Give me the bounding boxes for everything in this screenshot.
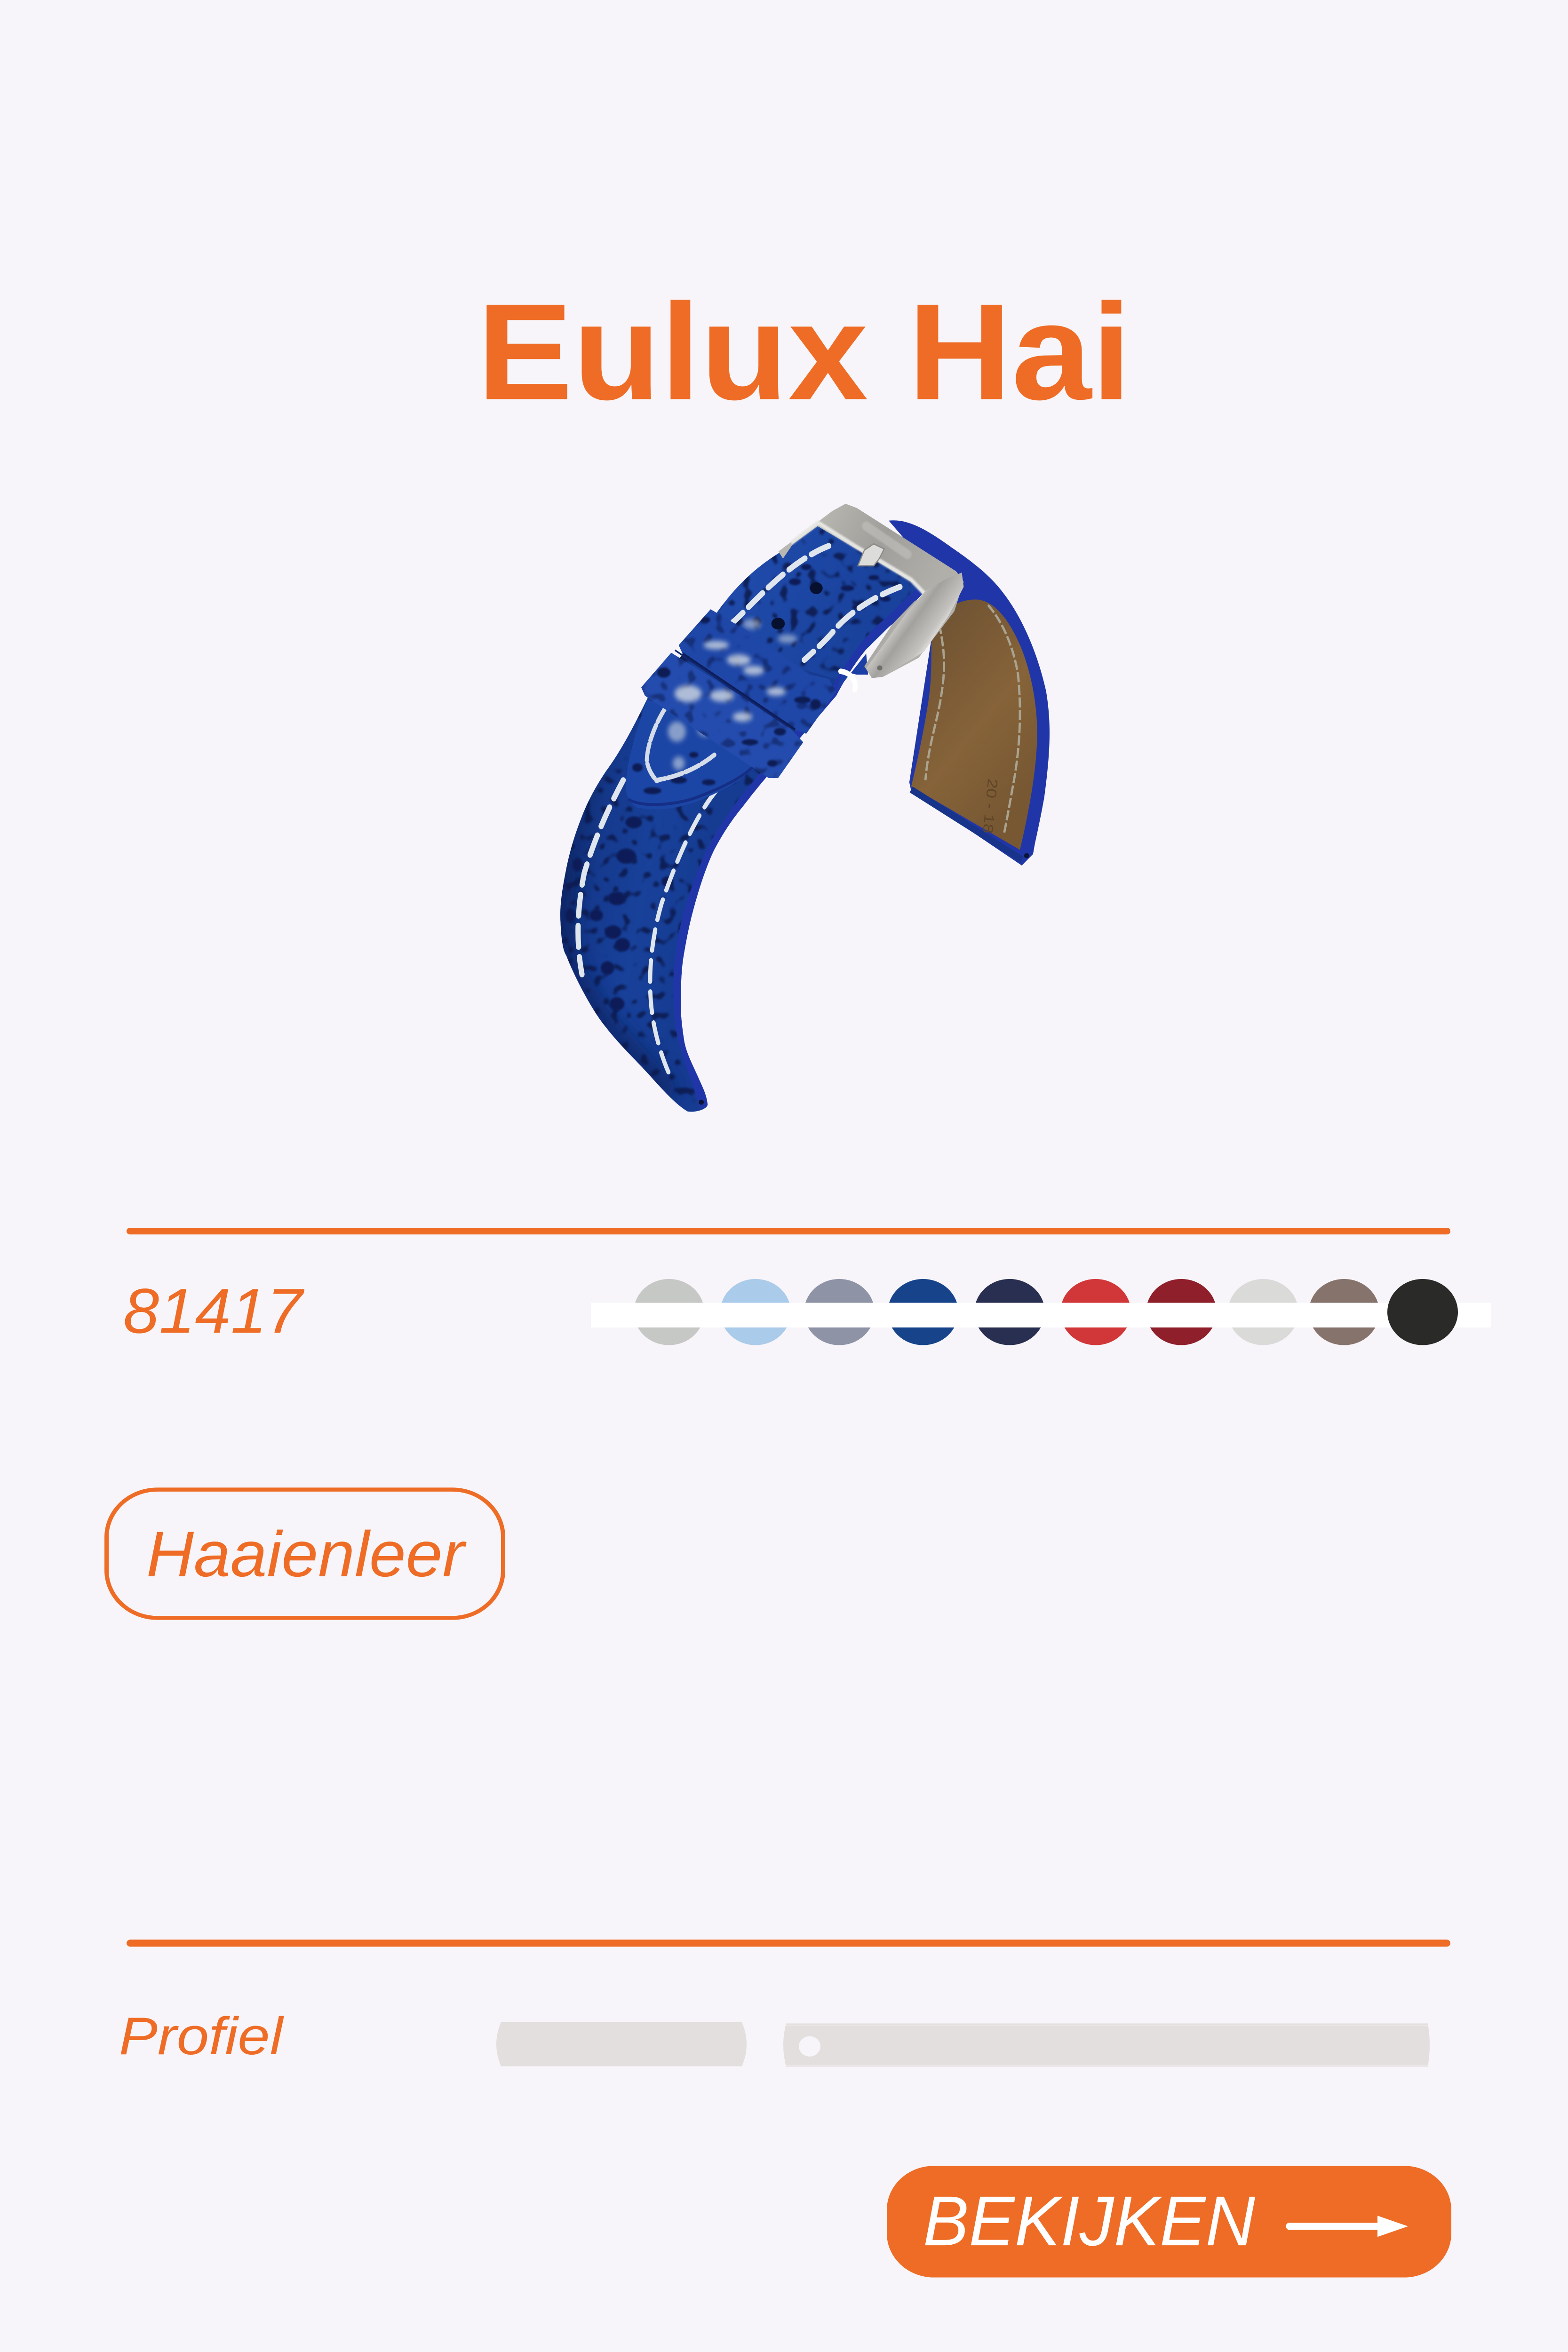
colour swatches <box>591 1279 1491 1345</box>
lining size marks: 20 - 18 <box>979 778 1001 834</box>
buckle <box>779 504 963 678</box>
swatch: royal blue <box>888 1279 958 1345</box>
dark spots <box>565 564 890 1010</box>
strap: rear section <box>889 520 1050 866</box>
keeper loops <box>637 603 840 785</box>
spring bar with white thread <box>836 653 868 691</box>
product photo: blue shark leather watch strap <box>555 504 1050 1118</box>
profile diagram <box>496 2022 1430 2066</box>
title: Eulux Hai <box>477 275 1131 428</box>
button <box>887 2166 1451 2278</box>
buckle frame <box>779 504 963 678</box>
swatch: sky blue <box>720 1279 791 1345</box>
spring bar hole at strap tip <box>699 1100 704 1105</box>
swatch: burgundy <box>1146 1279 1217 1345</box>
strap: front section <box>555 518 930 1118</box>
tag outline <box>106 1490 503 1618</box>
material tag <box>106 1490 503 1618</box>
tag label: Haaienleer <box>146 1518 467 1590</box>
strap tip <box>626 700 757 810</box>
swatch: red <box>1060 1279 1131 1345</box>
tan leather lining <box>911 599 1037 850</box>
silver sheen on upper strap <box>743 619 797 643</box>
spring bar hole <box>1024 853 1029 858</box>
grain speckles <box>561 529 911 1103</box>
speckled bottom edge <box>911 789 1022 859</box>
arrow <box>1286 2216 1408 2237</box>
engraved logo <box>866 526 907 555</box>
swatch: black <box>1387 1279 1458 1345</box>
profile label: Profiel <box>119 2007 284 2066</box>
prong <box>858 544 884 566</box>
front bar <box>866 572 963 678</box>
profile: short piece <box>496 2022 747 2066</box>
frame highlight <box>791 523 925 612</box>
prong holes <box>772 582 823 629</box>
divider top <box>127 1228 1450 1234</box>
divider bottom <box>127 1939 1450 1947</box>
bright inner edge <box>678 591 921 1107</box>
swatch: navy <box>974 1279 1045 1345</box>
lining stitches <box>925 605 1020 833</box>
white band <box>591 1303 1491 1327</box>
profile: long piece with hole <box>783 2024 1430 2066</box>
button label: BEKIJKEN <box>923 2182 1256 2260</box>
swatch: grey blue <box>804 1279 875 1345</box>
button shape <box>887 2166 1451 2278</box>
article number: 81417 <box>123 1275 304 1346</box>
stitching <box>578 546 900 1080</box>
swatch: taupe <box>1309 1279 1379 1345</box>
swatch: light grey <box>634 1279 704 1345</box>
pin hole <box>877 666 882 670</box>
product card <box>104 300 1491 2278</box>
side shading <box>562 856 671 1097</box>
swatch: pale grey <box>1228 1279 1298 1345</box>
